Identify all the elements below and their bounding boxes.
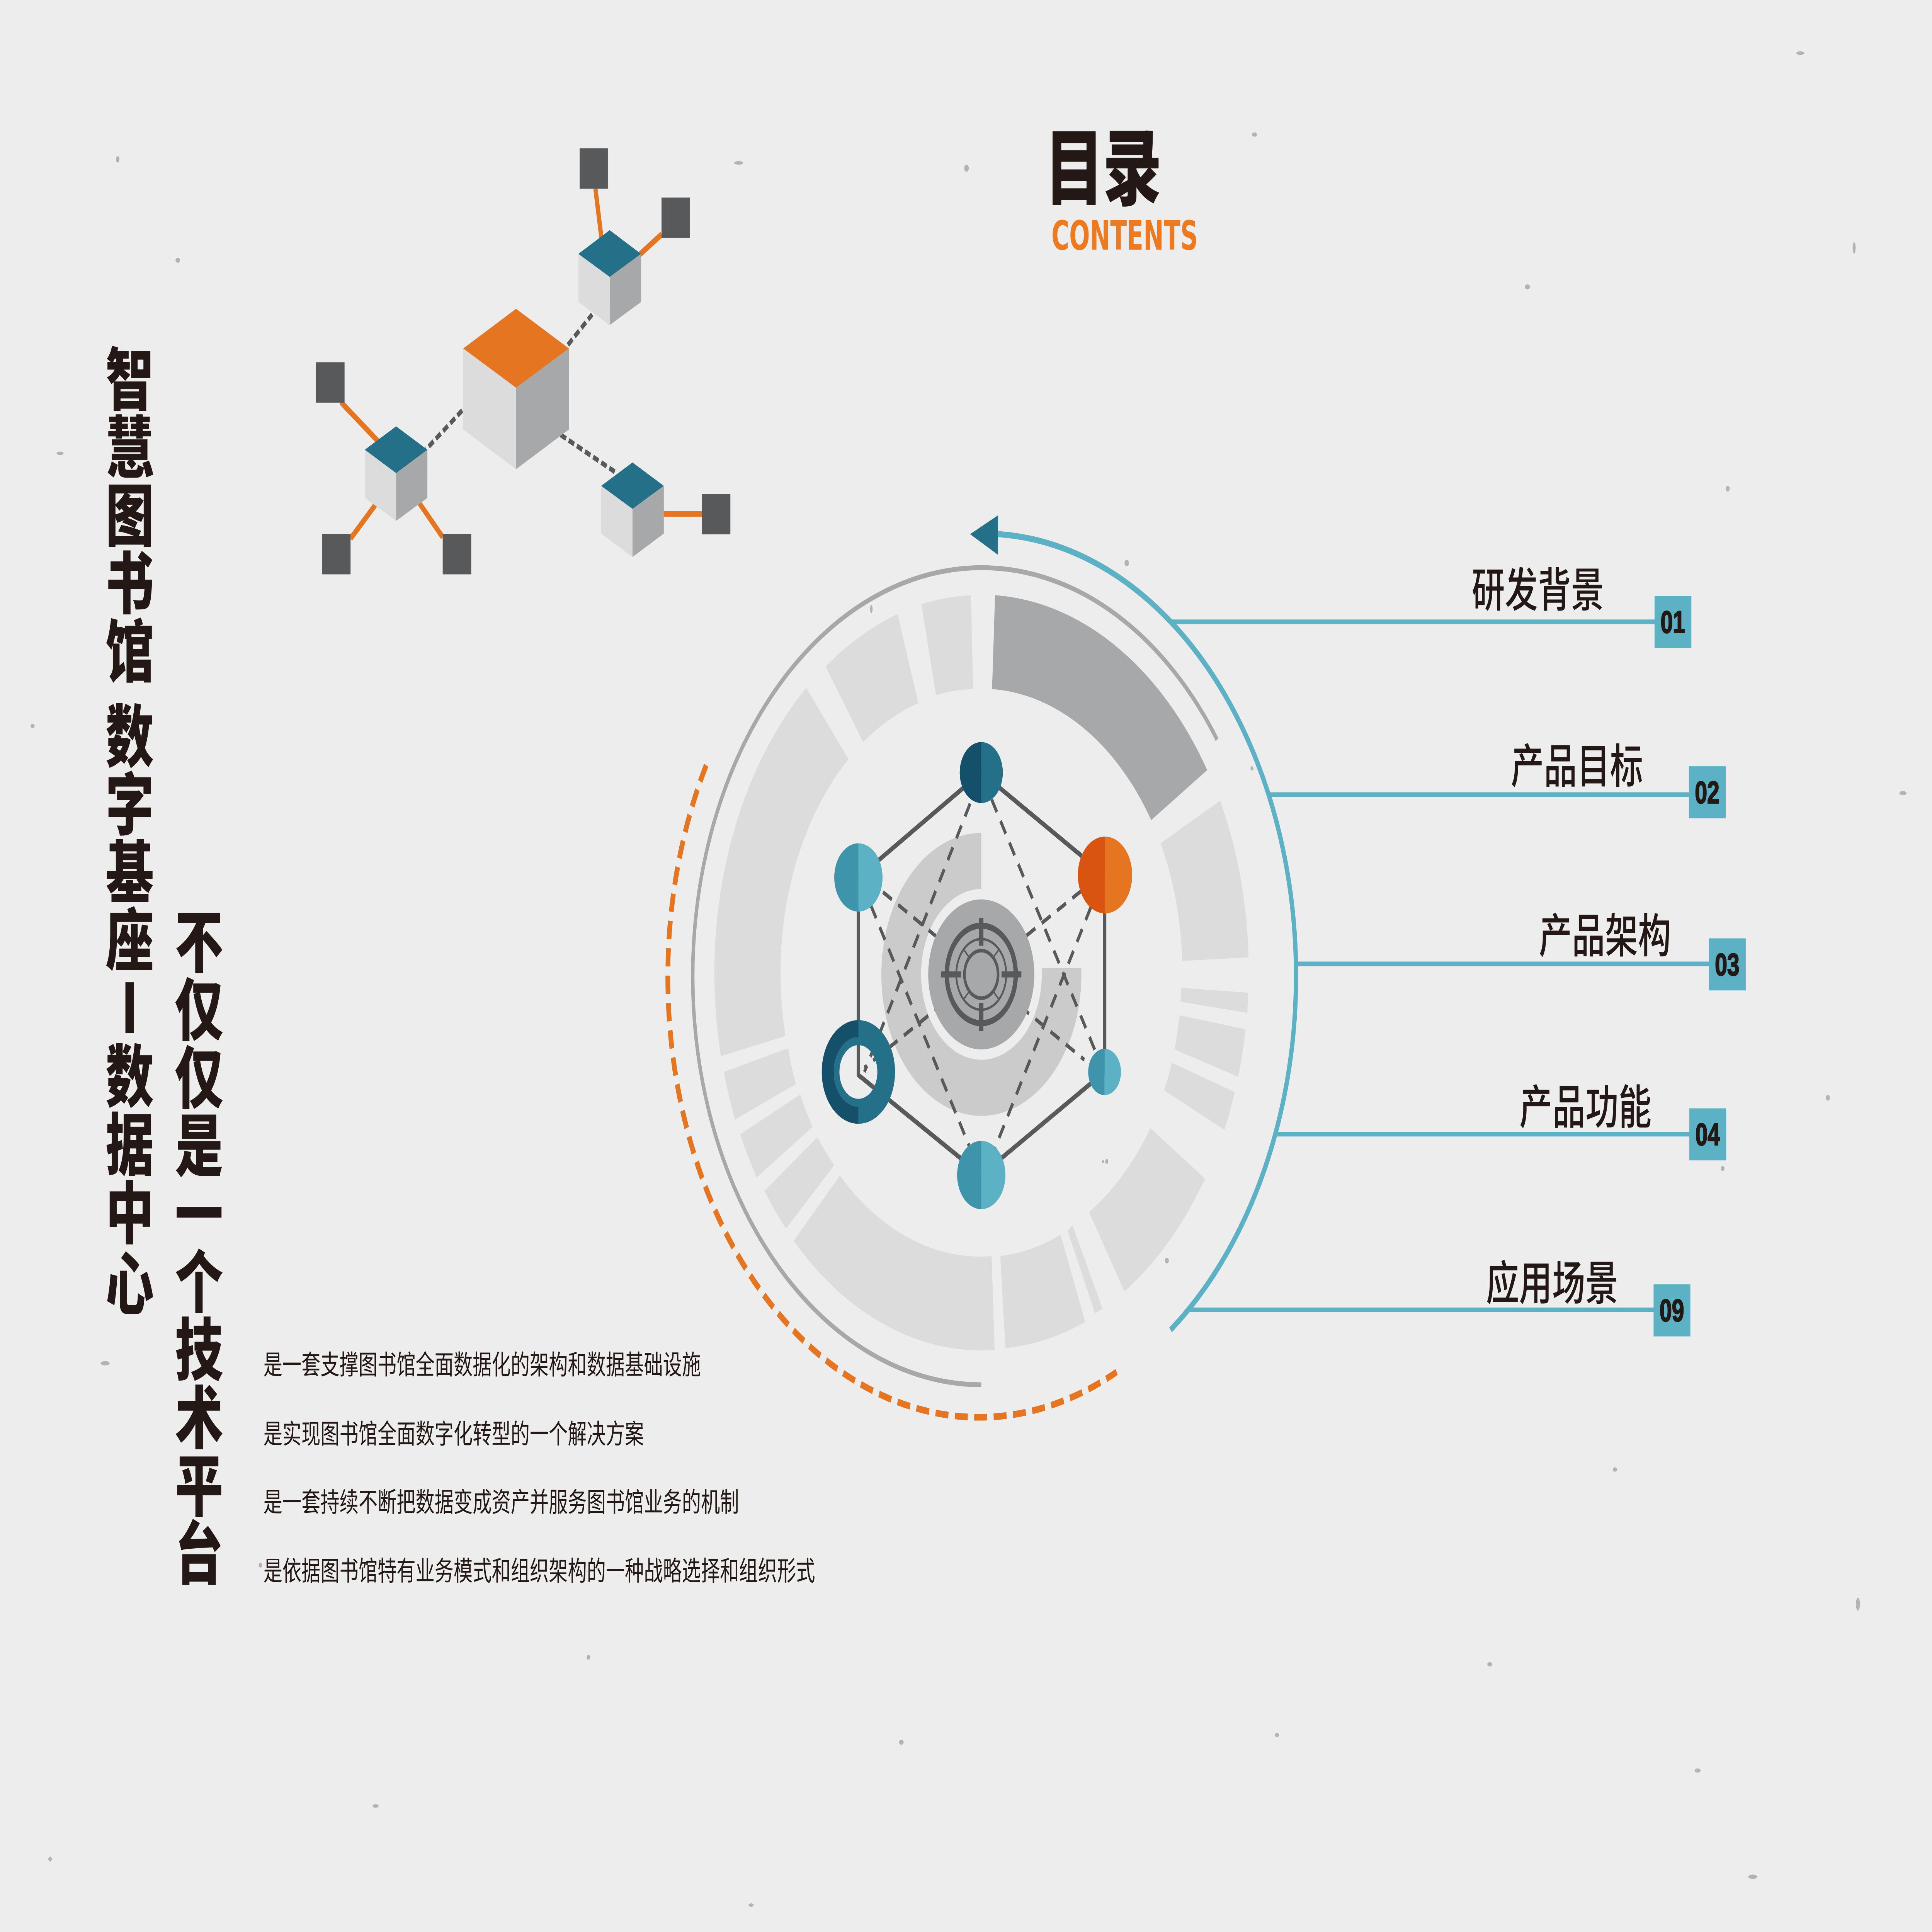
dashed cross links xyxy=(864,799,1095,1151)
central orange cube xyxy=(463,309,569,469)
item 03 xyxy=(1296,898,1746,990)
isometric cube network xyxy=(316,148,730,574)
body line 3: 是一套持续不断把数据变成资产并服务图书馆业务的机制 xyxy=(264,1481,739,1520)
item 02: 02 xyxy=(1695,775,1719,810)
node: top xyxy=(960,742,1003,803)
orange connectors xyxy=(341,189,702,539)
small teal cube left xyxy=(365,426,427,521)
leader lines and menu items xyxy=(1170,553,1746,1337)
light ring segments xyxy=(714,595,1248,1350)
body line 2: 是实现图书馆全面数字化转型的一个解决方案 xyxy=(264,1413,644,1451)
node: upper right orange xyxy=(1078,837,1132,913)
radial diagram xyxy=(668,515,1296,1417)
item 09 xyxy=(1190,1246,1690,1337)
item 04: 产品功能 xyxy=(1519,1070,1651,1138)
body line 1: 是一套支撑图书馆全面数据化的架构和数据基础设施 xyxy=(264,1344,701,1382)
body line 4: 是依据图书馆特有业务模式和组织架构的一种战略选择和组织形式 xyxy=(264,1549,815,1588)
item 04: 04 xyxy=(1696,1117,1720,1152)
small teal cube lower right xyxy=(601,463,664,557)
small teal cube upper right xyxy=(578,230,641,325)
item 02 xyxy=(1269,729,1726,818)
item 02: 产品目标 xyxy=(1511,729,1643,797)
item 09: 应用场景 xyxy=(1486,1246,1618,1314)
item 01 xyxy=(1170,553,1691,648)
node: lower left ring xyxy=(822,1020,895,1124)
inner C-shaped ring xyxy=(881,833,1082,1116)
blue arrow arc xyxy=(970,515,1296,1330)
dashed connectors xyxy=(425,315,617,473)
centre target icon xyxy=(928,900,1034,1049)
item 03: 产品架构 xyxy=(1539,898,1671,966)
orange dashed arc xyxy=(668,765,1117,1417)
hexagon outline xyxy=(859,772,1105,1175)
body text block xyxy=(264,1344,815,1588)
grey outer arc xyxy=(693,568,1217,1385)
highlighted ring segment xyxy=(992,595,1207,820)
node: upper left xyxy=(834,843,883,912)
node: lower right xyxy=(1088,1049,1121,1095)
item 01: 01 xyxy=(1661,605,1685,639)
node: bottom xyxy=(957,1141,1005,1209)
item 09: 09 xyxy=(1660,1293,1684,1328)
item 01: 研发背景 xyxy=(1472,553,1604,621)
title: 目录: 目录 xyxy=(1045,102,1162,223)
vertical heading: 智慧图书馆 数字基座 I 数据中心: 智慧图书馆数字基座I数据中心 xyxy=(105,325,154,1329)
subtitle: CONTENTS: CONTENTS xyxy=(1051,213,1198,259)
end squares xyxy=(316,148,730,574)
item 03: 03 xyxy=(1715,947,1740,982)
item 04 xyxy=(1276,1070,1726,1160)
vertical heading: 不仅仅是一个技术平台: 不仅仅是一个技术平台 xyxy=(175,888,223,1598)
